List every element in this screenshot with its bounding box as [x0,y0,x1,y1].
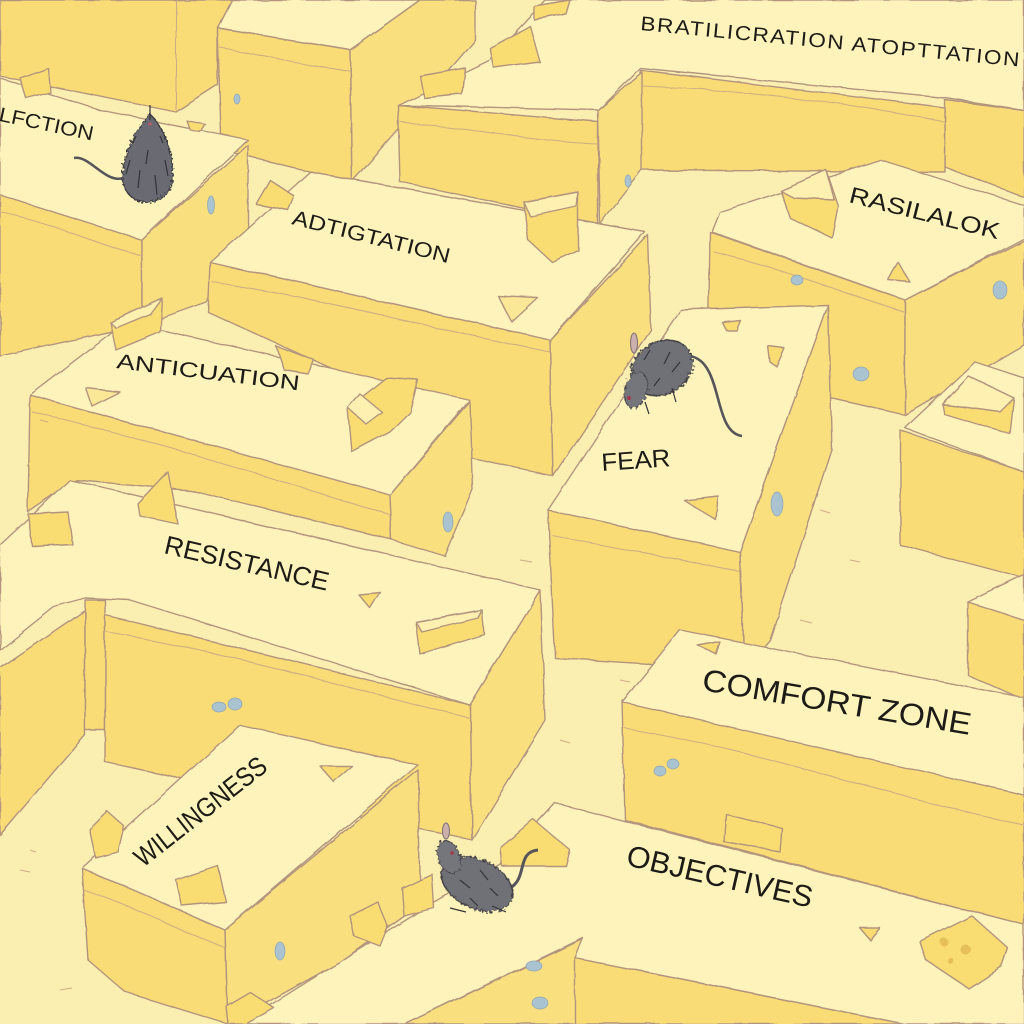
chunk: upper [490,26,540,68]
mouse: bottom centre [432,823,538,922]
block: objectives [240,803,1024,1024]
chunk: large holed cheese [920,916,1008,988]
label: objectives: OBJECTIVES [623,840,816,915]
label: anticuation: ANTICUATION [115,350,301,395]
mouse: top left [74,105,173,202]
label: resistance: RESISTANCE [162,530,332,597]
chunk: near lower mouse [500,820,570,866]
chunk: anticipation middle [276,346,314,374]
block: comfort zone [622,630,1024,925]
block: resistance [0,480,545,840]
block: objectives lower section [405,938,905,1024]
chunk: top centre [420,68,465,98]
chunk: anticipation small [86,388,120,406]
chunk: fear small two [768,346,784,366]
block: willingness [82,725,420,1024]
block: top left corner [0,0,233,112]
chunk: resistance wedge [416,610,484,654]
chunk: fear small one [722,320,740,330]
chunk: willingness bottom right [350,902,388,946]
label: willingness: WILLINGNESS [128,751,273,873]
chunk: objectives small [860,928,880,940]
block: top centre-left [218,0,475,182]
chunk: fear triangle [684,496,718,520]
label: adtigtation: ADTIGTATION [290,207,453,268]
block: anticipation [28,322,473,556]
chunk: anticipation left [110,298,162,350]
chunk: adaptation corner [256,180,294,210]
block: fear [548,305,832,670]
chunk: rasilalok wedge [780,170,838,238]
chunk: comfort zone small [698,642,720,654]
chunk: top edge [534,0,570,20]
mouse: on fear block [621,329,742,436]
block: rasilalok [708,160,1024,415]
chunk: wedge on adaptation [524,192,578,262]
block: top wall with adoption label [398,0,1024,224]
chunk: resistance small [358,592,380,608]
block: resistance left section [0,600,105,835]
chunk: top left [20,68,50,98]
chunk: resistance top [138,472,178,524]
label: bratilicration atoptation: BRATILICRATION ATOPTTATION [640,13,1022,72]
chunk: resistance left [28,512,72,546]
chunk: near mouse [186,120,205,132]
block: left with mouse [0,78,248,356]
chunk: anticipation double [348,378,418,452]
chunk: bottom [226,992,274,1024]
chunk: willingness left [90,812,124,858]
chunk: right block [942,376,1014,434]
block: lower right edge [968,575,1024,700]
label: fear: FEAR [600,444,671,477]
block: right edge [900,362,1024,578]
blue cheese holes [208,94,1007,1009]
chunk: willingness wedge [176,866,226,906]
block: adaptation [208,172,651,476]
chunk: comfort zone bottom [724,814,782,852]
chunk: bottom right of willingness [402,874,434,916]
floor speckles [20,420,860,990]
chunk: small triangle [498,296,538,322]
chunk: willingness small [320,766,352,782]
label: comfort zone: COMFORT ZONE [700,662,974,742]
chunk: rasilalok small [888,262,910,282]
label: rasilalok: RASILALOK [847,182,1003,244]
